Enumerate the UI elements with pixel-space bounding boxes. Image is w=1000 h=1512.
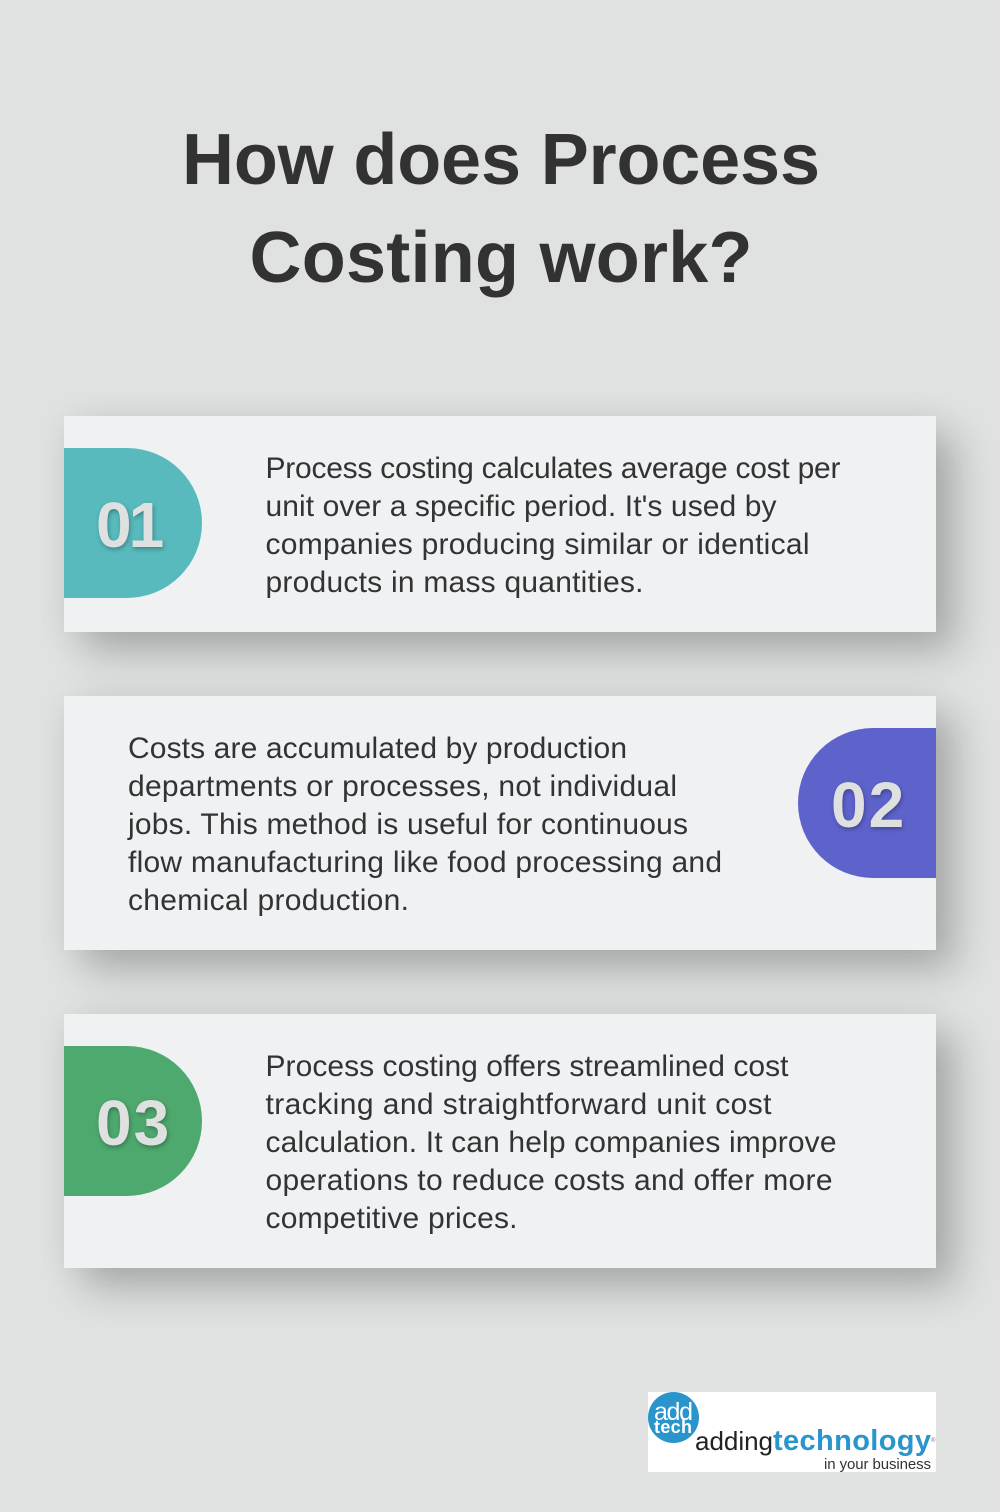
badge: 02: 02 [831, 769, 906, 841]
badge: 03: 03 [96, 1087, 171, 1159]
title [182, 120, 820, 298]
badge: 01 [64, 448, 202, 598]
text: step 02 description: jobs. This method is useful for continuous [127, 808, 688, 841]
text: step 01 description: products in mass quantities. [266, 566, 644, 599]
text: step 01 description: Process costing calculates average cost per [266, 452, 840, 485]
logo: adding technology: in your business [824, 1456, 931, 1473]
panel: step 03 [64, 1014, 936, 1268]
title: How does Process [182, 120, 820, 200]
logo: adding technology: tech [654, 1417, 692, 1437]
logo: adding technology: adding [695, 1426, 773, 1456]
title: Costing work? [250, 218, 752, 298]
badge: 01: 01 [96, 489, 161, 561]
badge: 02 [798, 728, 936, 878]
text: step 03 description: calculation. It can help companies improve [266, 1126, 836, 1159]
text: step 03 description: operations to reduce costs and offer more [266, 1164, 832, 1197]
logo: adding technology [648, 1392, 936, 1473]
text: step 02 description: flow manufacturing like food processing and [128, 846, 722, 879]
text: step 01 description [266, 452, 840, 599]
badge: 03 [64, 1046, 202, 1196]
text: step 03 description: competitive prices. [266, 1202, 518, 1235]
text: step 01 description: companies producing similar or identical [266, 528, 810, 561]
panel: step 02 [64, 696, 936, 950]
text: step 02 description: departments or processes, not individual [128, 770, 677, 803]
text: step 01 description: unit over a specific period. It's used by [266, 490, 776, 523]
logo: adding technology: add [654, 1398, 693, 1426]
panel: step 01 [64, 416, 936, 632]
logo: adding technology: technology [773, 1425, 931, 1457]
logo: adding technology: ® [931, 1437, 936, 1444]
text: step 03 description [266, 1050, 836, 1235]
text: step 03 description: Process costing offers streamlined cost [266, 1050, 789, 1083]
text: step 03 description: tracking and straightforward unit cost [266, 1088, 772, 1121]
text: step 02 description: chemical production. [128, 884, 409, 917]
text: step 02 description [127, 732, 722, 917]
text: step 02 description: Costs are accumulated by production [128, 732, 627, 765]
